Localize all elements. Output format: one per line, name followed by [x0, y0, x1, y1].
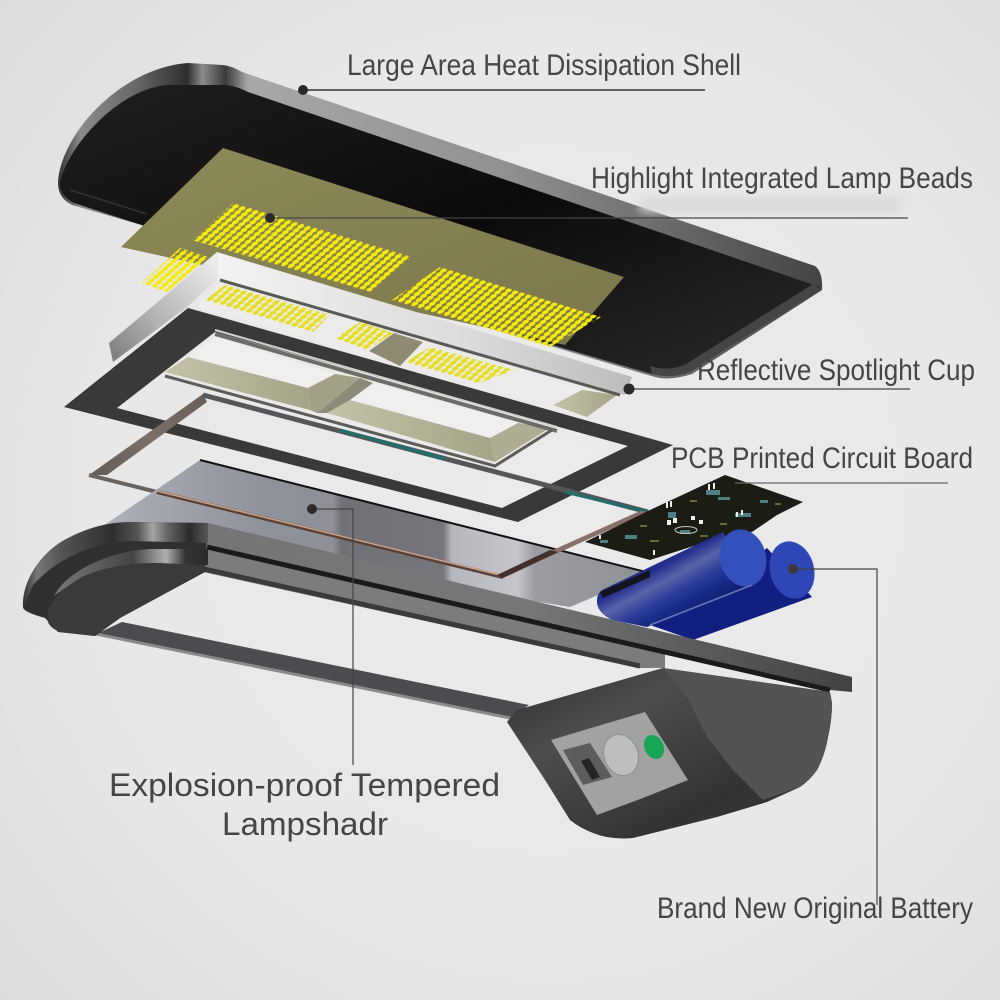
lower reflector windows — [165, 330, 557, 466]
sensor plate — [551, 712, 688, 815]
green indicator — [640, 732, 668, 762]
tempered glass lampshade — [97, 460, 650, 607]
label: Reflective Spotlight Cup — [624, 354, 975, 394]
black gasket frame — [64, 308, 673, 522]
label: Highlight Integrated Lamp Beads — [265, 162, 973, 223]
label: Large Area Heat Dissipation Shell — [298, 49, 741, 95]
label: Brand New Original Battery — [657, 564, 973, 925]
label: Explosion-proof Tempered Lampshadr — [109, 504, 500, 842]
front frame — [23, 522, 852, 718]
heat dissipation shell — [58, 63, 822, 378]
label: Explosion-proof Tempered Lampshadr: Explosion-proof Tempered — [109, 767, 500, 803]
thin copper frame — [89, 394, 648, 512]
batteries — [597, 524, 821, 640]
PCB circuit board — [585, 475, 803, 560]
reflective spotlight cup — [109, 252, 632, 417]
exploded lamp illustration — [23, 63, 852, 838]
PIR lens — [598, 729, 644, 781]
label: Large Area Heat Dissipation Shell: Large Area Heat Dissipation Shell — [347, 49, 741, 82]
sensor housing — [507, 668, 832, 838]
USB slot — [563, 743, 612, 785]
label: Explosion-proof Tempered Lampshadr: Lampshadr — [222, 806, 388, 842]
LED panel — [121, 148, 624, 347]
